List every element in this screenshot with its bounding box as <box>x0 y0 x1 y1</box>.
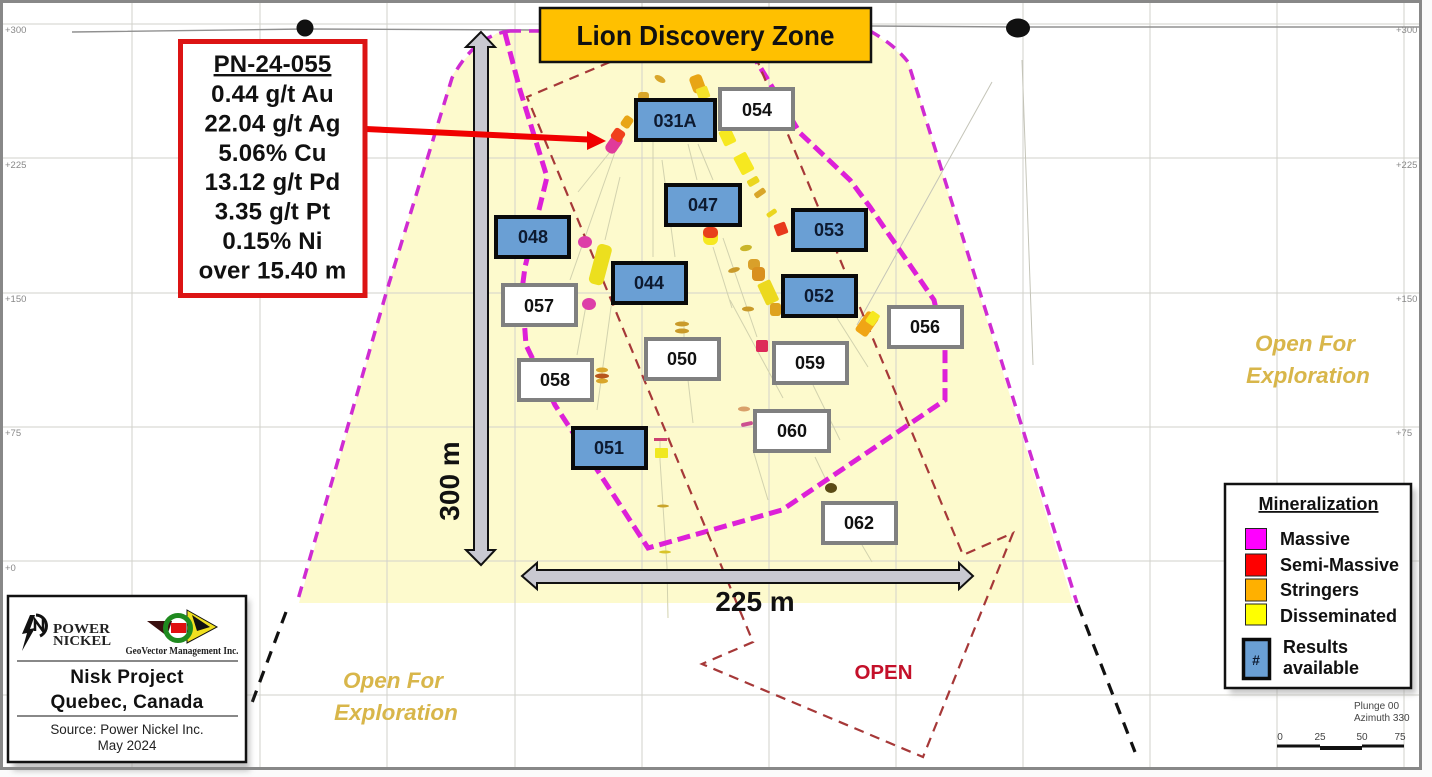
callout: PN-24-055 assay results <box>180 42 365 296</box>
depth axis labels: +0 <box>5 563 16 574</box>
drill hole labels: results available: 047 <box>688 195 718 215</box>
results available key <box>1244 640 1270 678</box>
open for exploration labels <box>334 331 1370 725</box>
mineralization intercepts <box>578 73 881 554</box>
open for exploration labels: Open For <box>343 668 444 693</box>
drill hole labels: pending: 056 <box>910 317 940 337</box>
drill hole labels: results available: 052 <box>804 286 834 306</box>
logo panel: Nisk Project <box>70 667 184 688</box>
depth axis labels: +300 <box>5 25 26 36</box>
drill hole labels: results available: 051 <box>594 438 624 458</box>
depth axis labels: +150 <box>1396 294 1417 305</box>
drill hole labels: pending <box>503 89 962 543</box>
drill hole traces <box>570 60 1033 618</box>
outer dashed magenta boundary <box>250 31 1135 757</box>
callout: PN-24-055 assay results: 5.06% Cu <box>218 140 327 167</box>
inner magenta boundary <box>505 33 945 548</box>
drill hole labels: results available: 048 <box>518 227 548 247</box>
callout: PN-24-055 assay results: PN-24-055 <box>214 51 331 78</box>
drill hole labels: results available: 044 <box>634 273 664 293</box>
logo panel: May 2024 <box>98 738 157 753</box>
red arrow <box>366 129 606 150</box>
OPEN label: OPEN <box>854 661 913 684</box>
depth axis labels: +75 <box>5 428 21 439</box>
open for exploration labels: Open For <box>1255 331 1356 356</box>
legend swatches <box>1246 528 1266 625</box>
depth axis labels: +300 <box>1396 25 1417 36</box>
scale bar: 50 <box>1356 732 1368 743</box>
callout: PN-24-055 assay results: 0.44 g/t Au <box>211 81 334 108</box>
callout: PN-24-055 assay results: 0.15% Ni <box>222 228 323 255</box>
drill hole labels: pending: 060 <box>777 421 807 441</box>
legend labels: Disseminated <box>1280 606 1397 626</box>
logo panel <box>8 596 250 771</box>
drill hole labels: pending: 050 <box>667 349 697 369</box>
drill hole labels: pending: 057 <box>524 296 554 316</box>
surface collars <box>296 18 1030 38</box>
300 m label: 300 m <box>434 441 465 521</box>
scale bar: 75 <box>1394 732 1406 743</box>
red dashed open outline <box>527 60 1013 757</box>
callout: PN-24-055 assay results: 13.12 g/t Pd <box>205 169 340 196</box>
scale bar: 0 <box>1277 732 1283 743</box>
depth axis labels <box>5 25 1417 574</box>
legend labels: Stringers <box>1280 580 1359 600</box>
horizontal 225 m arrow <box>522 563 973 617</box>
title banner <box>540 8 871 62</box>
open for exploration labels: Exploration <box>334 700 458 725</box>
logo panel: Source: Power Nickel Inc. <box>50 722 204 737</box>
legend labels <box>1280 529 1399 678</box>
black dashed extensions <box>250 605 1135 752</box>
legend labels: Results <box>1283 637 1348 657</box>
scale bar <box>1277 732 1406 748</box>
plunge and azimuth note: Plunge 00 <box>1354 701 1399 712</box>
legend <box>1225 484 1416 694</box>
Power Nickel logo <box>22 615 111 651</box>
drill hole labels: results available: 031A <box>653 111 697 131</box>
depth axis labels: +75 <box>1396 428 1412 439</box>
depth axis labels: +225 <box>1396 160 1417 171</box>
Power Nickel logo: NICKEL <box>53 634 111 649</box>
drill hole labels: pending: 058 <box>540 370 570 390</box>
open for exploration labels: Exploration <box>1246 363 1370 388</box>
drill hole labels: pending: 054 <box>742 100 772 120</box>
callout: PN-24-055 assay results: 3.35 g/t Pt <box>215 198 330 226</box>
yellow exploration zone <box>299 30 1073 603</box>
legend: Mineralization <box>1258 494 1379 514</box>
drill hole labels: pending: 059 <box>795 353 825 373</box>
callout: PN-24-055 assay results: over 15.40 m <box>199 258 346 284</box>
legend labels: Semi-Massive <box>1280 555 1399 575</box>
depth axis labels: +0 <box>1396 563 1407 574</box>
callout: PN-24-055 assay results: 22.04 g/t Ag <box>204 110 341 138</box>
results available key: # <box>1252 652 1260 668</box>
drill hole labels: results available <box>496 100 866 468</box>
legend labels: available <box>1283 658 1359 678</box>
logo panel: Quebec, Canada <box>50 692 204 713</box>
surface trace <box>72 26 1420 32</box>
Power Nickel logo: POWER <box>53 622 111 637</box>
drill hole labels: pending: 062 <box>844 513 874 533</box>
depth axis labels: +150 <box>5 294 26 305</box>
legend labels: Massive <box>1280 529 1350 549</box>
GeoVector logo: GeoVector Management Inc. <box>126 646 239 657</box>
vertical 300 m arrow <box>434 32 495 565</box>
GeoVector logo <box>126 610 239 657</box>
title banner: Lion Discovery Zone <box>576 20 834 51</box>
depth axis labels: +225 <box>5 160 26 171</box>
plunge and azimuth note <box>1354 701 1410 724</box>
scale bar: 25 <box>1314 732 1326 743</box>
drill hole labels: results available: 053 <box>814 220 844 240</box>
225 m label: 225 m <box>715 586 795 617</box>
plunge and azimuth note: Azimuth 330 <box>1354 713 1410 724</box>
